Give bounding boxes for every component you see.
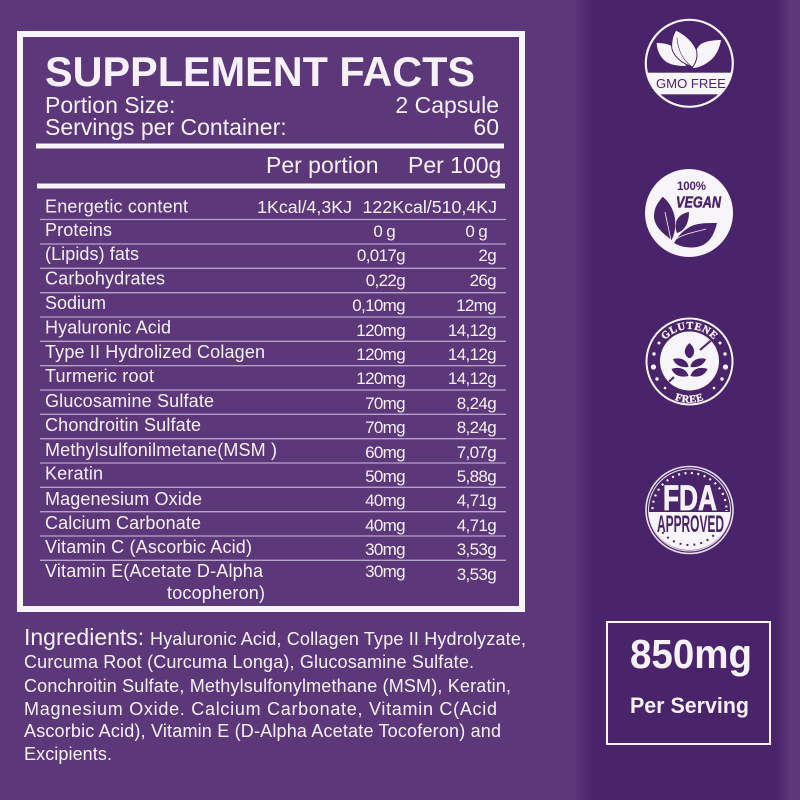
nutrient rows: Energetic content (45, 196, 188, 216)
nutrient rows: 3,53g (457, 565, 496, 584)
nutrient rows: 30mg (365, 562, 405, 581)
callout: 850mg per serving: 850mg (630, 631, 752, 677)
nutrient rows: 122Kcal/510,4KJ (363, 197, 497, 217)
serving information: 60 (473, 114, 499, 140)
nutrient rows: 0 g (373, 222, 395, 241)
icon: gluten free badge: GLUTENE (662, 322, 718, 340)
nutrient rows: 40mg (365, 491, 405, 510)
nutrient rows: Vitamin E(Acetate D-Alpha (45, 561, 264, 581)
nutrient rows: 8,24g (457, 394, 496, 413)
icon: FDA approved badge: FDA (663, 479, 717, 518)
nutrient rows: 0,22g (366, 271, 405, 290)
icon: GMO free badge: GMO FREE (656, 76, 726, 91)
table frame (20, 34, 522, 609)
nutrient rows (40, 196, 506, 603)
column headers: Per portion (266, 152, 379, 178)
nutrient rows: 120mg (356, 345, 405, 364)
nutrient rows: 3,53g (457, 540, 496, 559)
icon: FDA approved badge (646, 466, 733, 554)
nutrient rows: Chondroitin Sulfate (45, 415, 201, 435)
ingredients text block (24, 624, 526, 764)
nutrient rows: 120mg (356, 369, 405, 388)
nutrient rows: tocopheron) (167, 583, 265, 603)
nutrient rows: 70mg (365, 418, 405, 437)
icon: GMO free badge (640, 20, 740, 107)
icon: 100% vegan badge: 100% (677, 181, 706, 193)
ingredients text block: Conchroitin Sulfate, Methylsulfonylmethane (MSM), Keratin, (24, 676, 511, 696)
serving information: 2 Capsule (395, 92, 499, 118)
panel: supplement facts table (20, 34, 522, 609)
icon: gluten free badge: FREE (674, 393, 704, 403)
serving information: Portion Size: (45, 92, 175, 118)
column headers: Per 100g (408, 152, 501, 178)
nutrient rows: 26g (470, 271, 496, 290)
nutrient rows: 5,88g (457, 467, 496, 486)
nutrient rows: Sodium (45, 293, 106, 313)
nutrient rows: 50mg (365, 467, 405, 486)
nutrient rows: 120mg (356, 321, 405, 340)
nutrient rows: Turmeric root (45, 366, 154, 386)
serving information (45, 92, 499, 140)
ingredients text block: Ascorbic Acid), Vitamin E (D-Alpha Acetate Tocoferon) and (24, 721, 501, 741)
icon: 100% vegan badge: VEGAN (676, 194, 722, 212)
icon: 100% vegan badge (645, 169, 733, 257)
nutrient rows: Keratin (45, 464, 103, 484)
nutrient rows: 8,24g (457, 418, 496, 437)
nutrient rows: 0,10mg (352, 296, 405, 315)
nutrient rows: Vitamin C (Ascorbic Acid) (45, 537, 252, 557)
nutrient rows: Magenesium Oxide (45, 489, 202, 509)
ingredients text block: Magnesium Oxide. Calcium Carbonate, Vitamin C(Acid (24, 699, 497, 719)
icon: gluten free badge (646, 318, 734, 406)
ingredients text block: Curcuma Root (Curcuma Longa), Glucosamine Sulfate. (24, 652, 474, 672)
nutrient rows: 40mg (365, 516, 405, 535)
nutrient rows: 7,07g (457, 443, 496, 462)
right sidebar band (574, 0, 790, 800)
ingredients text block: Hyaluronic Acid, Collagen Type II Hydrolyzate, (150, 629, 526, 649)
nutrient rows: Carbohydrates (45, 268, 165, 288)
nutrient rows: Methylsulfonilmetane(MSM ) (45, 440, 277, 460)
column headers (36, 144, 505, 188)
ingredients text block: Ingredients: (24, 624, 144, 650)
nutrient rows: 14,12g (448, 369, 496, 388)
nutrient rows: Proteins (45, 220, 112, 240)
callout: 850mg per serving: Per Serving (630, 693, 749, 718)
title: SUPPLEMENT FACTS (45, 49, 475, 95)
callout: 850mg per serving (607, 622, 770, 744)
nutrient rows: Hyaluronic Acid (45, 318, 171, 338)
nutrient rows: Type II Hydrolized Colagen (45, 342, 265, 362)
nutrient rows: 4,71g (457, 516, 496, 535)
nutrient rows: 14,12g (448, 345, 496, 364)
nutrient rows: 0 g (465, 222, 487, 241)
nutrient rows: 60mg (365, 443, 405, 462)
nutrient rows: 4,71g (457, 491, 496, 510)
nutrient rows: 2g (478, 246, 496, 265)
nutrient rows: 12mg (456, 296, 496, 315)
nutrient rows: 1Kcal/4,3KJ (257, 197, 352, 217)
ingredients text block: Excipients. (24, 744, 112, 764)
nutrient rows: Calcium Carbonate (45, 513, 201, 533)
nutrient rows: 14,12g (448, 321, 496, 340)
nutrient rows: 30mg (365, 540, 405, 559)
nutrient rows: 0,017g (357, 246, 405, 265)
nutrient rows: 70mg (365, 394, 405, 413)
serving information: Servings per Container: (45, 114, 287, 140)
nutrient rows: (Lipids) fats (45, 244, 139, 264)
icon: FDA approved badge: APPROVED (657, 511, 724, 538)
nutrient rows: Glucosamine Sulfate (45, 391, 214, 411)
